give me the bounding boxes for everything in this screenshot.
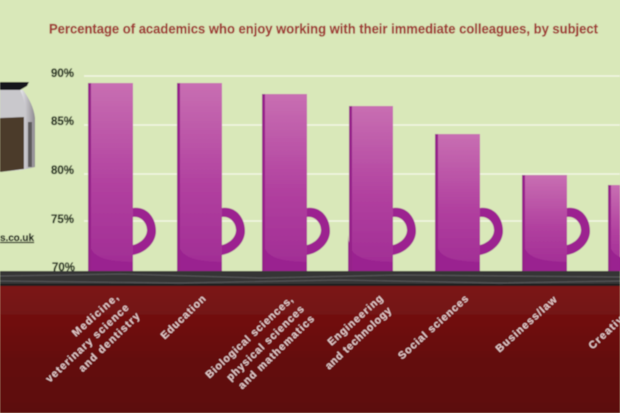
mug: education (177, 83, 245, 271)
y-axis labels: 85% (51, 116, 74, 128)
label: medicine: Medicine, (70, 292, 121, 339)
y-axis labels: 75% (51, 214, 74, 226)
floor: dark counter strip (0, 271, 620, 286)
y-axis labels: 70% (52, 262, 75, 274)
floor: red base (0, 286, 620, 413)
icon: coffee pot (0, 82, 35, 172)
label: engineering: and technology (323, 305, 394, 372)
website credit: s.co.uk (0, 233, 34, 244)
label: social sciences: Social sciences (396, 293, 471, 362)
mug: engineering (348, 106, 416, 271)
bar chart: mugs (88, 83, 620, 271)
mug: business (522, 175, 590, 271)
mug: medicine (88, 83, 156, 271)
label: biological sciences: physical sciences (224, 303, 307, 384)
label: education: Education (158, 293, 208, 342)
label: medicine: and dentistry (77, 310, 143, 375)
label: engineering: Engineering (325, 293, 385, 348)
label: medicine: veterinary science (44, 302, 132, 385)
y-axis labels: 80% (51, 165, 74, 177)
y-axis labels: 90% (51, 68, 74, 80)
mug: creative arts (608, 185, 620, 271)
category labels (44, 290, 620, 392)
label: business: Business/law (493, 293, 560, 355)
mug: biological sciences (262, 94, 330, 271)
mug: social sciences (435, 134, 503, 271)
grid lines (84, 76, 620, 221)
label: biological sciences: Biological sciences, (203, 294, 296, 381)
label: biological sciences: and mathematics (236, 313, 317, 392)
y-axis labels (51, 68, 75, 274)
